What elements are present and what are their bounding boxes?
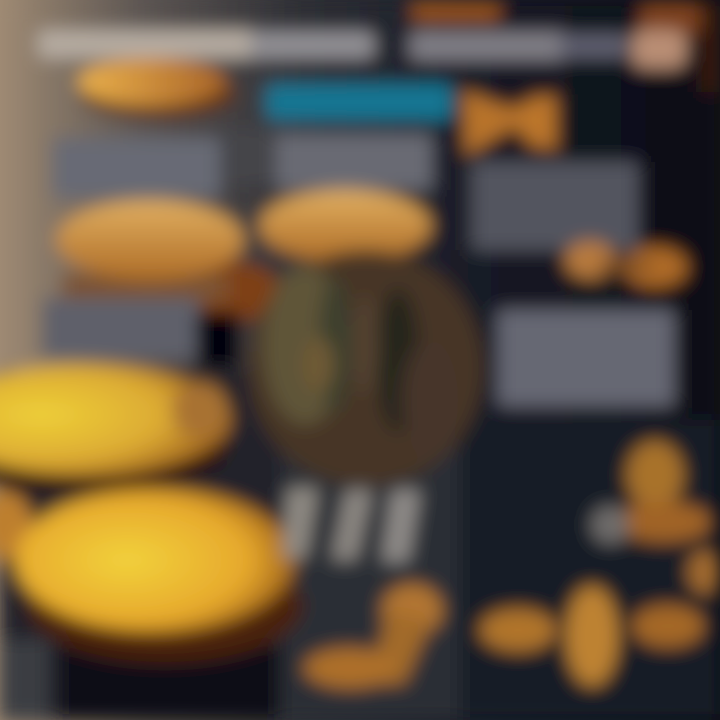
icon: bottom right snack bbox=[480, 586, 704, 686]
icon: small snack right bbox=[565, 241, 687, 287]
text panel: middle right bbox=[498, 310, 674, 406]
title bbox=[38, 30, 686, 68]
potato: large bottom bbox=[15, 488, 303, 662]
potato: small edge bbox=[0, 491, 32, 559]
potatoes: middle pair bbox=[56, 190, 431, 280]
icon: right cross snack bbox=[591, 441, 720, 594]
text panel: upper left bbox=[52, 128, 432, 198]
top right orange glow bbox=[412, 0, 720, 92]
dark shadow beside panel bbox=[196, 312, 240, 368]
text panel: upper right bbox=[472, 162, 638, 250]
subtitle badge bbox=[266, 84, 452, 120]
potato: top bbox=[78, 58, 236, 118]
circle emblem bbox=[248, 250, 484, 486]
three pale bars bbox=[282, 488, 420, 562]
icon: bow-shaped snack top bbox=[462, 90, 556, 156]
text panel: middle left bbox=[42, 298, 200, 358]
potato: large left bbox=[0, 364, 231, 490]
icon: bottom centre snack bbox=[304, 584, 442, 688]
shadow under middle potatoes bbox=[62, 262, 281, 322]
